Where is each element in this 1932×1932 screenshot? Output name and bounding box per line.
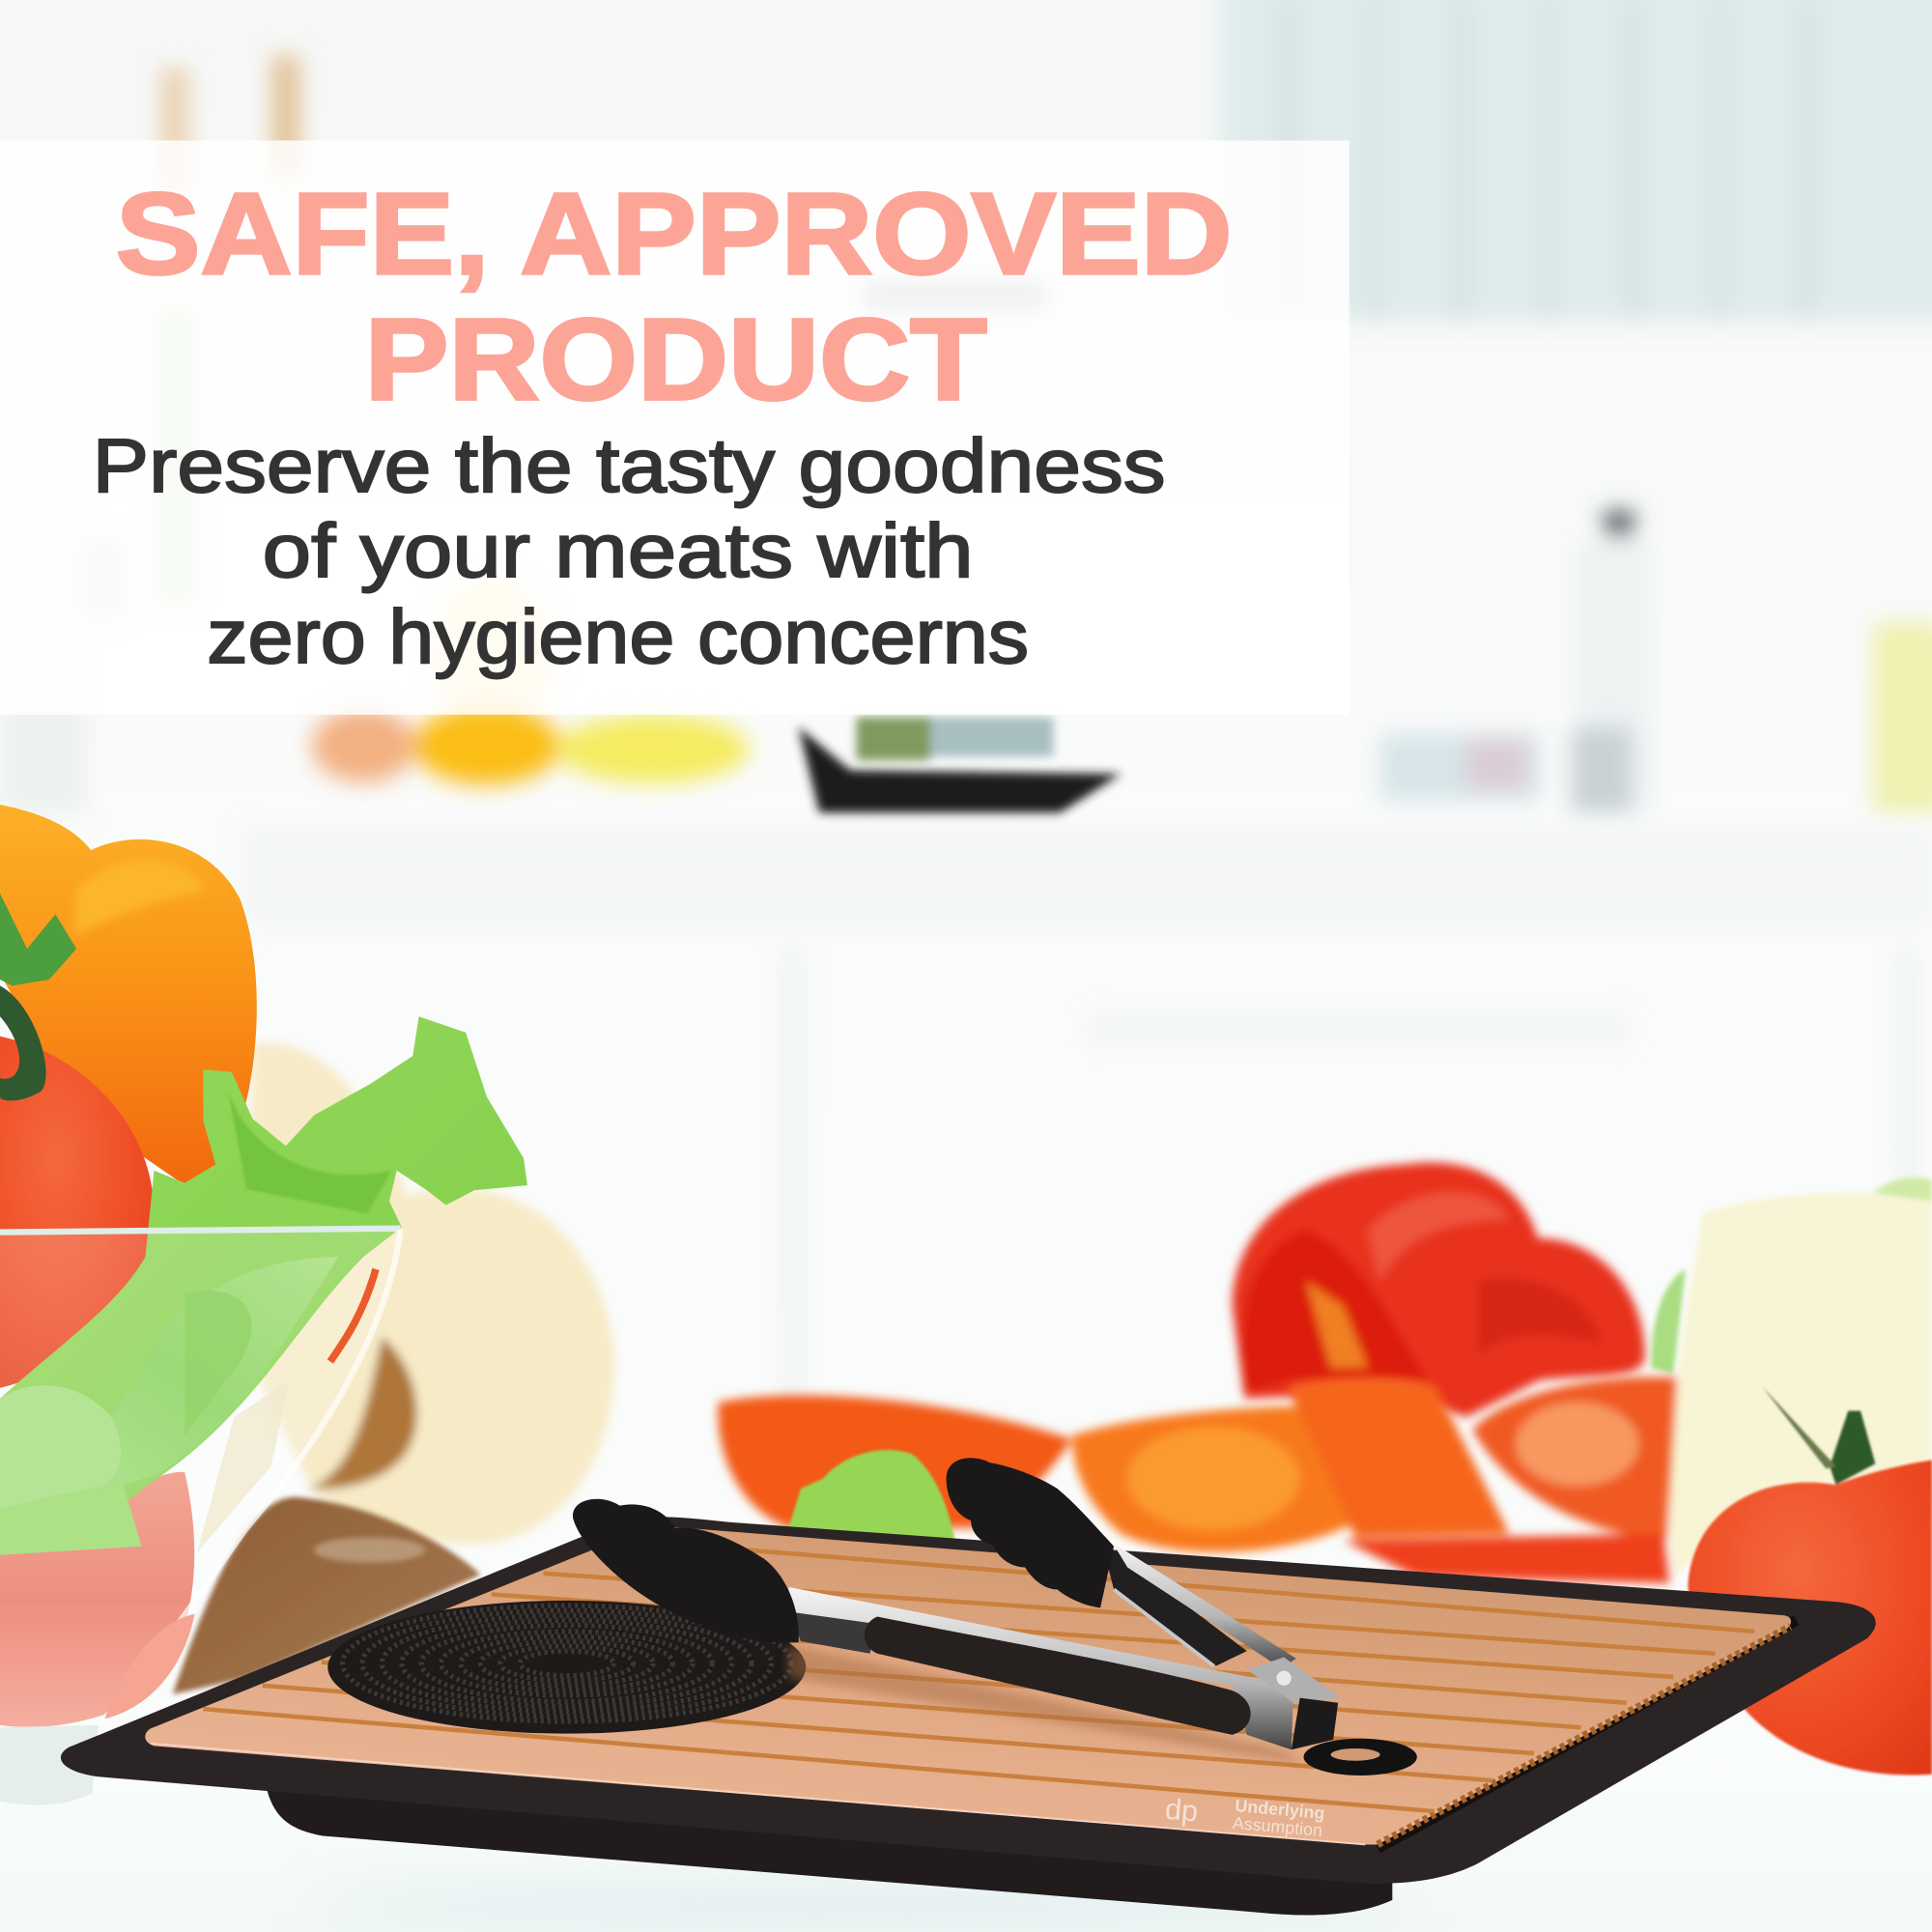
bamboo board [145,1525,1797,1848]
sliced vegetables [718,1377,1676,1583]
product tray base [267,1786,1392,1916]
yellow pepper [0,805,257,1185]
hinge [1247,1658,1341,1703]
blurred pan [799,717,1122,813]
tray shadow [308,1887,1417,1921]
subtitle [93,422,1166,679]
brand logo: Underlying [1235,1796,1325,1823]
red bell pepper [1233,1162,1645,1417]
brand logo: dp [1164,1793,1200,1829]
subtitle: of your meats with [263,507,974,593]
board grooves [203,1540,1754,1811]
title [116,169,1233,424]
tongs [573,1458,1417,1776]
brand logo [1164,1793,1325,1840]
lettuce [0,1016,527,1555]
title: PRODUCT [365,295,987,424]
scrubber [327,1601,806,1734]
blurred fruit on counter [312,706,750,784]
counter top [0,1731,1932,1932]
front arm steel [788,1587,1293,1749]
bread loaf [246,1043,614,1544]
grip [865,1616,1251,1735]
subtitle: Preserve the tasty goodness [93,422,1166,508]
subtitle: zero hygiene concerns [207,593,1029,679]
back arm [1101,1542,1296,1668]
block of cheese [1651,1178,1932,1575]
glass bowl [0,1229,401,1805]
tomato in bowl top [0,1033,154,1392]
lettuce piece behind tray [788,1450,955,1540]
right tomato [1688,1386,1932,1776]
tongs shadow [788,1645,1306,1765]
ring [1303,1739,1417,1776]
panel: headline [0,140,1350,715]
tomato in bowl bottom [0,1472,194,1727]
brown bread [173,1497,480,1694]
title: SAFE, APPROVED [116,169,1233,298]
leaf stem [0,894,76,1100]
front head [573,1499,799,1642]
back head [947,1458,1114,1608]
brand logo: Assumption [1232,1813,1323,1840]
product tray rim [61,1517,1876,1884]
